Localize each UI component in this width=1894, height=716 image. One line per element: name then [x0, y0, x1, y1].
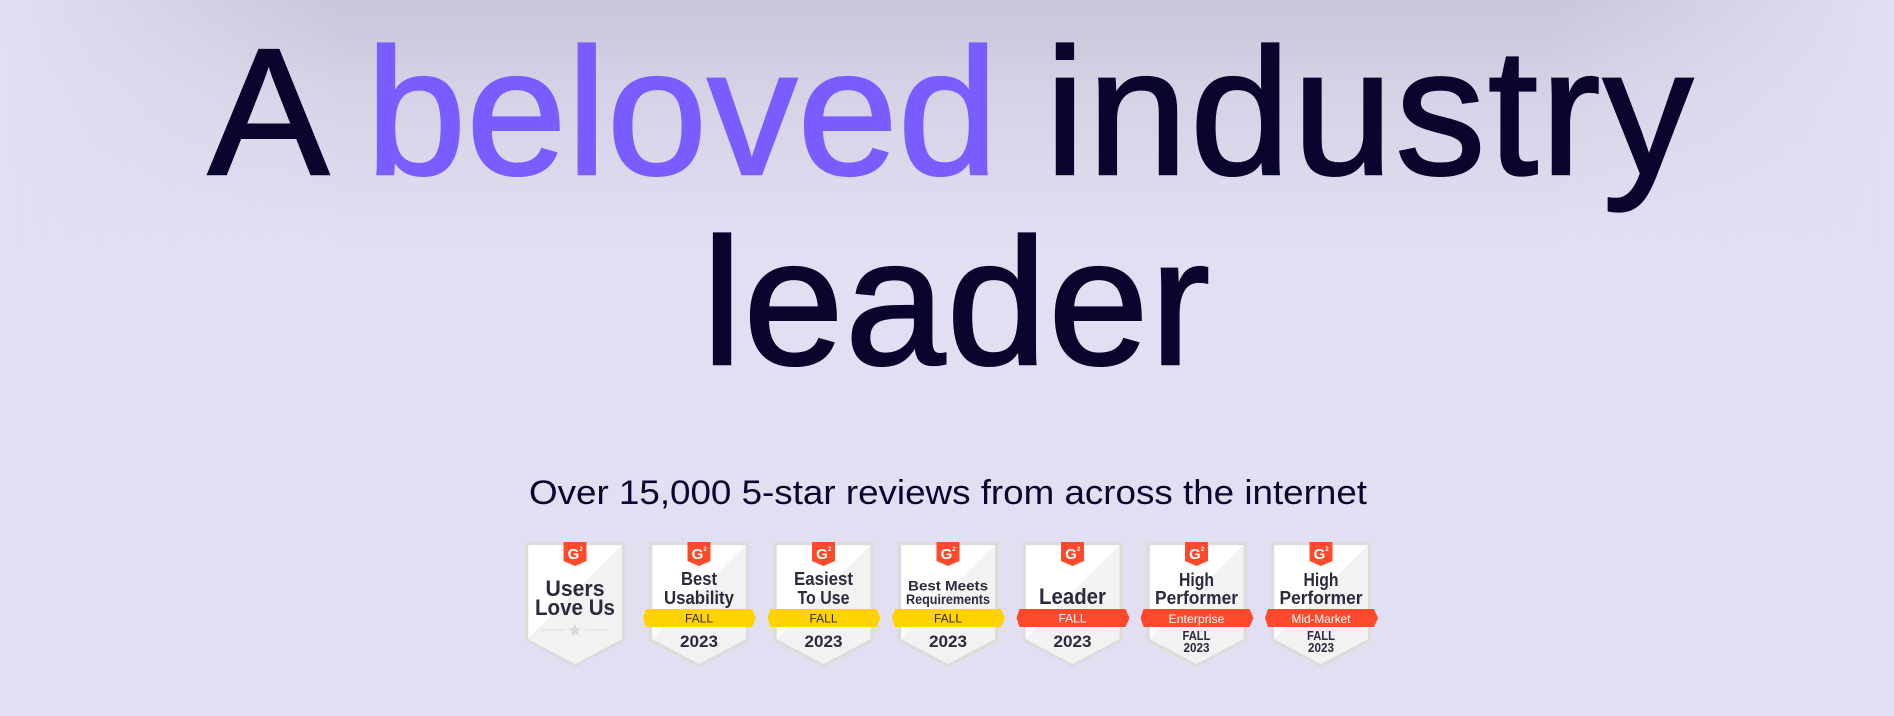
badge: Leader: 2 [1077, 547, 1081, 553]
badge: Easiest To Use: G [816, 546, 828, 563]
badge: Users Love Us: G [568, 546, 579, 563]
badge: Easiest To Use: 2023 [804, 632, 842, 651]
badge: High Performer Mid-Market [1265, 542, 1378, 666]
badge: Best Usability: FALL [685, 612, 713, 626]
badge: Easiest To Use: 2 [828, 547, 832, 553]
badge: Leader: 2023 [1054, 632, 1092, 651]
badge: Best Meets Requirements: G [941, 546, 952, 563]
badge: Users Love Us: Love Us [535, 595, 615, 620]
title word: leader: leader [702, 202, 1210, 403]
badge: Users Love Us: Users [546, 576, 604, 601]
badge: High Performer Mid-Market: Mid-Market [1292, 612, 1351, 626]
badge: High Performer Mid-Market: FALL [1307, 629, 1335, 643]
badge: High Performer Enterprise [1140, 542, 1254, 666]
top background shadow [102, 0, 1792, 156]
badge: Best Meets Requirements: 2 [952, 547, 956, 553]
badge: Easiest To Use: To Use [798, 588, 850, 608]
badge: High Performer Mid-Market: 2 [1325, 547, 1329, 553]
title word: beloved: beloved [366, 12, 998, 213]
title word: A: A [208, 12, 329, 213]
badge: High Performer Enterprise: Performer [1155, 588, 1238, 608]
badge: High Performer Mid-Market: G [1314, 546, 1325, 563]
badge: Best Usability: G [692, 546, 703, 563]
badge: High Performer Mid-Market: Performer [1280, 588, 1362, 608]
badge: High Performer Mid-Market: 2023 [1308, 641, 1334, 655]
badge: High Performer Enterprise: FALL [1182, 629, 1211, 643]
badge: High Performer Enterprise: High [1179, 570, 1214, 590]
badge: Leader [1016, 542, 1130, 666]
title word: industry: industry [1045, 12, 1693, 213]
badge: Leader: FALL [1058, 612, 1087, 626]
badge: Best Usability: 2 [703, 547, 707, 553]
badge: Easiest To Use: Easiest [794, 569, 853, 589]
badge: Best Usability [643, 542, 756, 666]
badge: Users Love Us [526, 542, 624, 666]
badge: High Performer Enterprise: 2023 [1184, 641, 1210, 655]
badge: Best Meets Requirements: Requirements [906, 592, 990, 607]
badge: Best Meets Requirements: FALL [934, 612, 962, 626]
badge: Best Usability: Usability [664, 588, 734, 608]
badge: Best Meets Requirements: Best Meets [908, 578, 988, 594]
badge: High Performer Mid-Market: High [1304, 570, 1338, 590]
badge: Best Meets Requirements [892, 542, 1005, 666]
badge: Easiest To Use: FALL [810, 612, 838, 626]
badge: Best Meets Requirements: 2023 [929, 632, 967, 651]
badge: Easiest To Use [768, 542, 880, 666]
badge: High Performer Enterprise: Enterprise [1168, 612, 1225, 626]
badge: Best Usability: Best [681, 569, 717, 589]
badge: High Performer Enterprise: 2 [1201, 547, 1205, 553]
badge: High Performer Enterprise: G [1189, 546, 1201, 563]
badge: Best Usability: 2023 [680, 632, 718, 651]
badge: Leader: G [1065, 546, 1077, 563]
subtitle: Over 15,000 5-star reviews from across the internet [529, 474, 1368, 512]
badge: Leader: Leader [1039, 584, 1106, 609]
badge: Users Love Us: 2 [579, 547, 583, 553]
badge row [526, 542, 1378, 666]
title [208, 12, 1693, 403]
